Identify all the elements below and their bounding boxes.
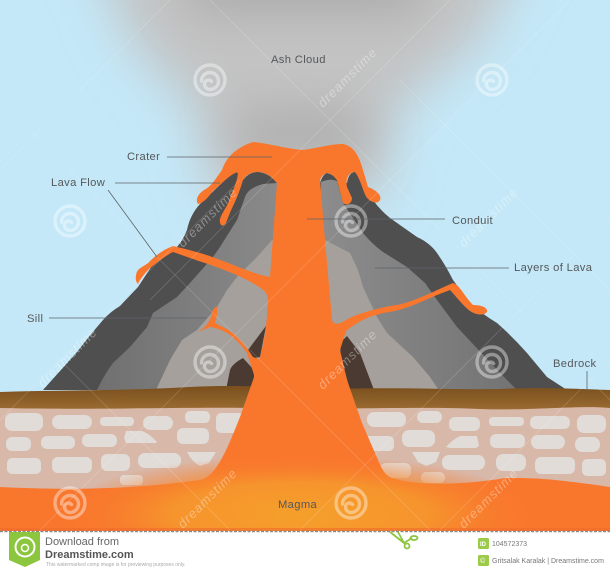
footer: This watermarked comp image is for previewing purposes only. [46,562,185,568]
id badge: ID [480,542,487,548]
watermark text: dreamstime [175,184,240,250]
footer [0,531,610,573]
copyright badge: © [480,557,486,565]
lava: magma chamber, conduit and crater cap [0,142,610,531]
ash cloud [90,0,530,200]
magma glow [50,450,550,531]
watermark text: dreamstime [456,465,521,531]
watermark text: dreamstime [456,184,521,250]
label: Sill: Sill [27,313,43,325]
watermark spirals [55,65,507,518]
bedrock [0,386,610,410]
image id: 104572373 [492,541,527,548]
watermark text: dreamstime [35,324,100,390]
layer: dark brown chambers [226,326,374,390]
layer: light gray rock [156,240,440,392]
copyright badge [478,555,489,566]
stones [5,411,606,485]
credit: Gritsalak Karalak | Dreamstime.com [492,558,604,565]
scissors icon [390,532,418,548]
id badge [478,538,489,549]
layer: dark outer rock [43,172,567,390]
footer: Dreamstime.com [45,549,134,561]
watermark text: dreamstime [315,44,380,110]
label: Ash Cloud: Ash Cloud [271,54,326,66]
watermark text [35,44,521,531]
stone layer [0,407,610,490]
volcano [43,172,567,392]
watermark text: dreamstime [175,465,240,531]
label: Magma: Magma [278,499,317,511]
label: Layers of Lava: Layers of Lava [514,262,593,274]
label: Lava Flow: Lava Flow [51,177,106,189]
labels [27,54,597,511]
magma edge [0,528,610,531]
label: Conduit: Conduit [452,215,494,227]
lava: sill [198,307,262,378]
layer: mid gray rock [97,180,517,390]
label leader lines [49,157,587,390]
watermark text: dreamstime [315,326,380,392]
label: Crater: Crater [127,151,160,163]
label: Bedrock: Bedrock [553,358,597,370]
footer download text: Download from [45,536,119,548]
footer badge [9,532,40,567]
